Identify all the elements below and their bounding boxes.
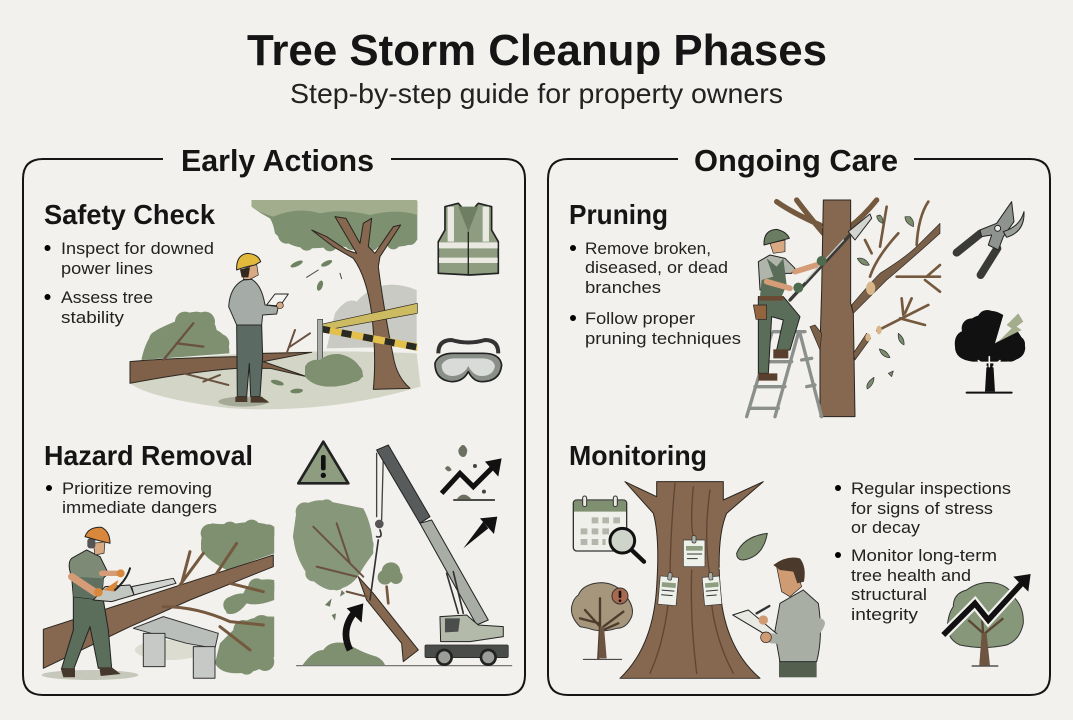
icon: storm-damaged tree silhouette — [955, 310, 1025, 393]
heading: ongoing care: Ongoing Care — [694, 143, 898, 178]
icon: safety vest — [438, 203, 498, 275]
heading: pruning: Pruning — [569, 199, 668, 230]
heading: hazard removal: Hazard Removal — [44, 440, 253, 471]
heading: safety check: Safety Check — [44, 199, 215, 230]
section: monitoring text: structural — [851, 585, 927, 604]
section: pruning text: pruning techniques — [585, 329, 741, 348]
section: monitoring text: for signs of stress — [851, 499, 993, 518]
icon: warning triangle — [298, 442, 348, 483]
section: monitoring text — [835, 479, 1011, 624]
illustration: crane lifting tree — [293, 445, 512, 666]
section: safety check text — [44, 199, 215, 327]
section: hazard removal text: immediate dangers — [62, 498, 217, 517]
illustration: chainsaw worker cutting fallen tree — [42, 520, 276, 680]
title: Tree Storm Cleanup Phases — [247, 26, 827, 75]
section: monitoring text: Regular inspections — [851, 479, 1011, 498]
section: pruning text: Follow proper — [585, 309, 695, 328]
section: safety check text: stability — [61, 308, 125, 327]
section: pruning text: branches — [585, 278, 661, 297]
icon: stressed tree with alert — [571, 583, 632, 659]
icon: safety goggles — [435, 340, 502, 382]
section: monitoring text: Monitor long-term — [851, 546, 997, 565]
illustration: inspector with clipboard — [733, 557, 820, 677]
section: safety check text: Inspect for downed — [61, 239, 214, 258]
icon: calendar with magnifier — [573, 496, 644, 562]
icon: debris trend arrow — [442, 445, 502, 500]
section: pruning text — [569, 199, 741, 348]
section: monitoring text: tree health and — [851, 566, 971, 585]
section: hazard removal text — [44, 440, 253, 517]
section: monitoring text: or decay — [851, 518, 921, 537]
section: safety check text: power lines — [61, 259, 153, 278]
section: safety check text: Assess tree — [61, 288, 153, 307]
section: pruning text: Remove broken, — [585, 239, 711, 258]
section: pruning text: diseased, or dead — [585, 258, 728, 277]
heading: early actions: Early Actions — [181, 143, 374, 178]
section: monitoring heading: Monitoring — [569, 440, 707, 471]
section: monitoring text: integrity — [851, 605, 919, 624]
section: hazard removal text: Prioritize removing — [62, 479, 212, 498]
illustration: trunk with inspection notes — [620, 482, 767, 678]
icon: pruning shears — [957, 202, 1024, 275]
subtitle: Step-by-step guide for property owners — [290, 78, 783, 109]
icon: healthy tree with rising trend arrow — [943, 574, 1031, 666]
icon: upward arrow — [463, 517, 497, 548]
illustration: pruning worker on ladder — [747, 200, 940, 417]
illustration: safety check scene — [130, 200, 421, 409]
